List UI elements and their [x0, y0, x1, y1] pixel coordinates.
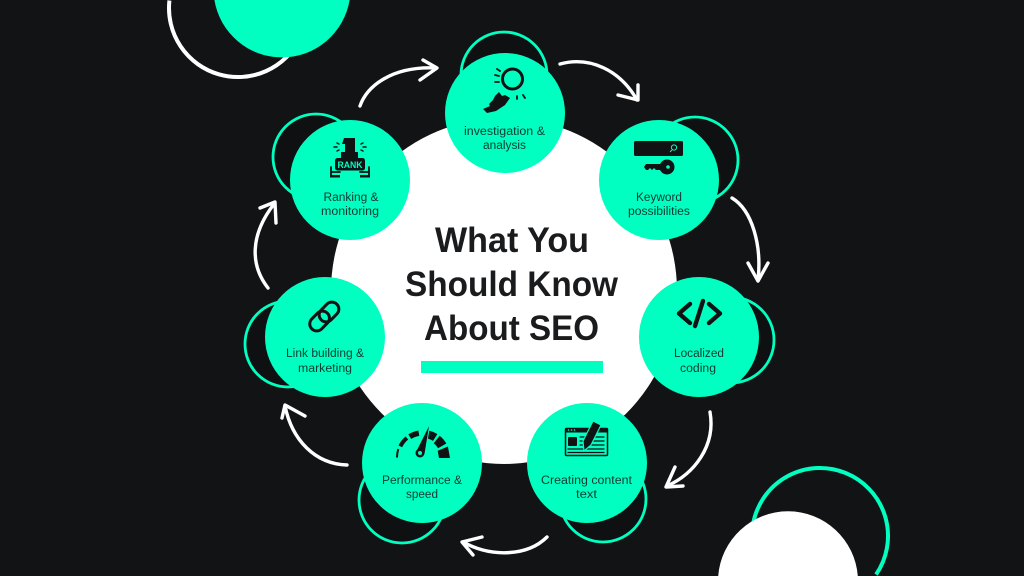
icon: number one rank badge: RANK: [338, 160, 363, 170]
label: [382, 475, 462, 501]
arrow: localized to creating: [666, 412, 711, 487]
node: performance & speed: [359, 403, 482, 543]
title: About SEO: [424, 309, 599, 348]
label: analysis: [483, 140, 526, 152]
icon: magnifying glass with hand: [483, 69, 525, 113]
node: ranking & monitoring: [273, 114, 410, 240]
icon: speedometer: [397, 423, 450, 458]
node: link building & marketing: [245, 277, 385, 397]
label: Performance &: [382, 475, 462, 487]
icon: code brackets: [679, 301, 720, 326]
label: [541, 475, 633, 501]
label: marketing: [298, 363, 352, 375]
label: possibilities: [628, 206, 690, 218]
label: Localized: [674, 348, 724, 360]
label: Link building &: [286, 348, 364, 360]
node: creating content text: [527, 403, 647, 542]
arrow: keyword to localized: [732, 198, 768, 281]
title: What You: [435, 221, 589, 260]
label: speed: [406, 489, 438, 501]
label: [628, 192, 690, 218]
label: [674, 348, 724, 375]
central white circle: [331, 118, 677, 464]
node: keyword possibilities: [599, 117, 738, 240]
arrow: ranking to investigation: [360, 60, 437, 106]
label: Ranking &: [324, 192, 379, 204]
label: monitoring: [321, 206, 379, 218]
decoration: top-left circles: [169, 0, 350, 77]
icon: web page with pencil: [565, 421, 608, 456]
arrow: link to ranking: [255, 202, 276, 288]
arrow: performance to link: [282, 405, 347, 465]
node: investigation & analysis: [445, 32, 565, 173]
node: localized coding: [639, 277, 774, 397]
title: Should Know: [405, 265, 619, 304]
title underline bar: [421, 361, 603, 373]
arrow: creating to performance: [462, 537, 547, 555]
arrow: investigation to keyword: [560, 62, 638, 100]
decoration: bottom-right circles: [718, 468, 888, 576]
label: Creating content: [541, 475, 633, 487]
label: text: [576, 489, 598, 501]
title: [405, 221, 619, 348]
label: [286, 348, 364, 375]
icon: chain link: [307, 299, 342, 334]
label: coding: [680, 363, 716, 375]
label: investigation &: [464, 126, 545, 138]
icon: search bar and key: [634, 141, 683, 174]
label: Keyword: [636, 192, 682, 204]
label: [321, 192, 379, 218]
label: [464, 126, 545, 152]
